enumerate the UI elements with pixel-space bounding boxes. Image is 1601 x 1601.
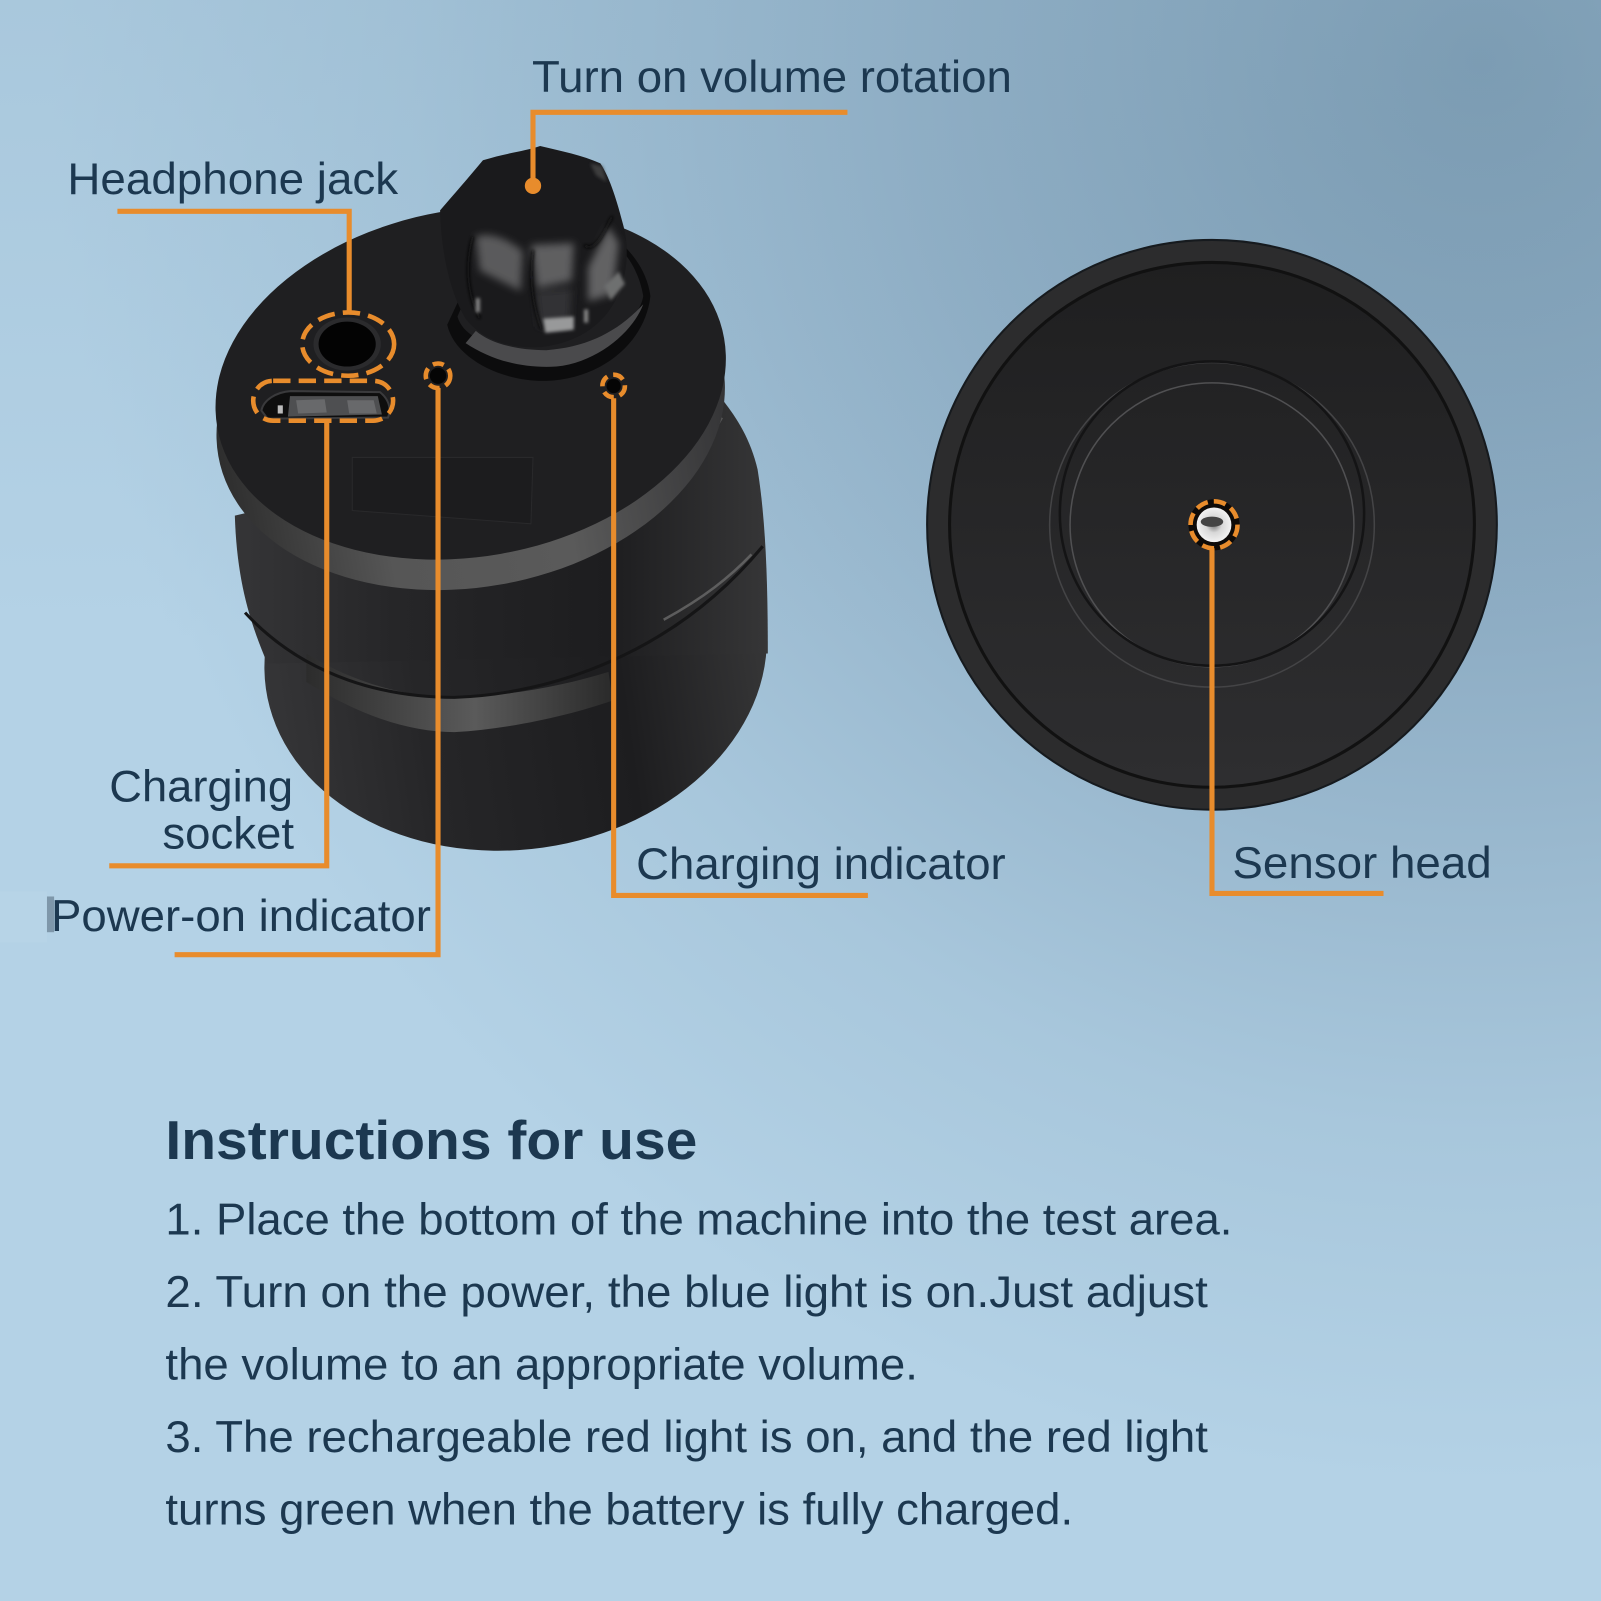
knob lobe seams <box>468 216 613 329</box>
callout: power-on indicator <box>47 363 450 955</box>
label plate <box>352 457 533 524</box>
device: bottom view with sensor <box>927 240 1497 810</box>
right edge highlights <box>664 554 751 620</box>
instructions text block <box>165 1109 1232 1534</box>
flange inner <box>457 243 643 352</box>
step 3: 3. The rechargeable red light is on, and the red light <box>165 1411 1208 1462</box>
concentric rings <box>1050 361 1374 687</box>
callout: power-on indicator: Power-on indicator <box>51 890 431 941</box>
bottom disc rim <box>927 240 1497 810</box>
sensor head <box>1188 499 1240 550</box>
callout: turn on volume rotation: Turn on volume rotation <box>532 51 1012 102</box>
top face <box>187 167 754 599</box>
callout: charging socket: socket <box>162 807 295 858</box>
volume knob <box>440 146 627 347</box>
device: side product view <box>187 146 793 883</box>
callout: charging socket <box>109 381 393 866</box>
indicator dots <box>430 368 621 393</box>
callout: sensor head <box>1191 501 1492 893</box>
headphone jack socket <box>313 318 381 371</box>
callout: charging indicator <box>602 375 1006 895</box>
step 3: turns green when the battery is fully charged. <box>165 1483 1073 1534</box>
callout: headphone jack: Headphone jack <box>67 153 399 204</box>
charging port <box>261 391 390 419</box>
step 3 <box>165 1411 1208 1534</box>
step 2 <box>165 1266 1208 1389</box>
bottom disc inner <box>950 262 1474 787</box>
callout: turn on volume rotation <box>525 51 1012 194</box>
lower groove <box>245 546 763 697</box>
callout: charging socket: Charging <box>109 761 293 812</box>
callout: headphone jack <box>67 153 399 376</box>
volume knob flange <box>447 240 650 381</box>
knob dome highlight <box>590 163 607 182</box>
instructions heading: Instructions for use <box>165 1109 697 1171</box>
knob lobes <box>476 227 619 327</box>
knob notches <box>476 272 625 333</box>
rim band <box>188 194 754 629</box>
flange crescent <box>466 304 643 367</box>
device lower body <box>235 400 793 883</box>
callout: charging indicator: Charging indicator <box>636 838 1006 889</box>
step 2: the volume to an appropriate volume. <box>165 1338 918 1389</box>
step 1: 1. Place the bottom of the machine into the test area. <box>165 1193 1232 1244</box>
step 2: 2. Turn on the power, the blue light is on.Just adjust <box>165 1266 1208 1317</box>
lower highlight band <box>306 653 613 732</box>
callout: sensor head: Sensor head <box>1232 837 1492 888</box>
